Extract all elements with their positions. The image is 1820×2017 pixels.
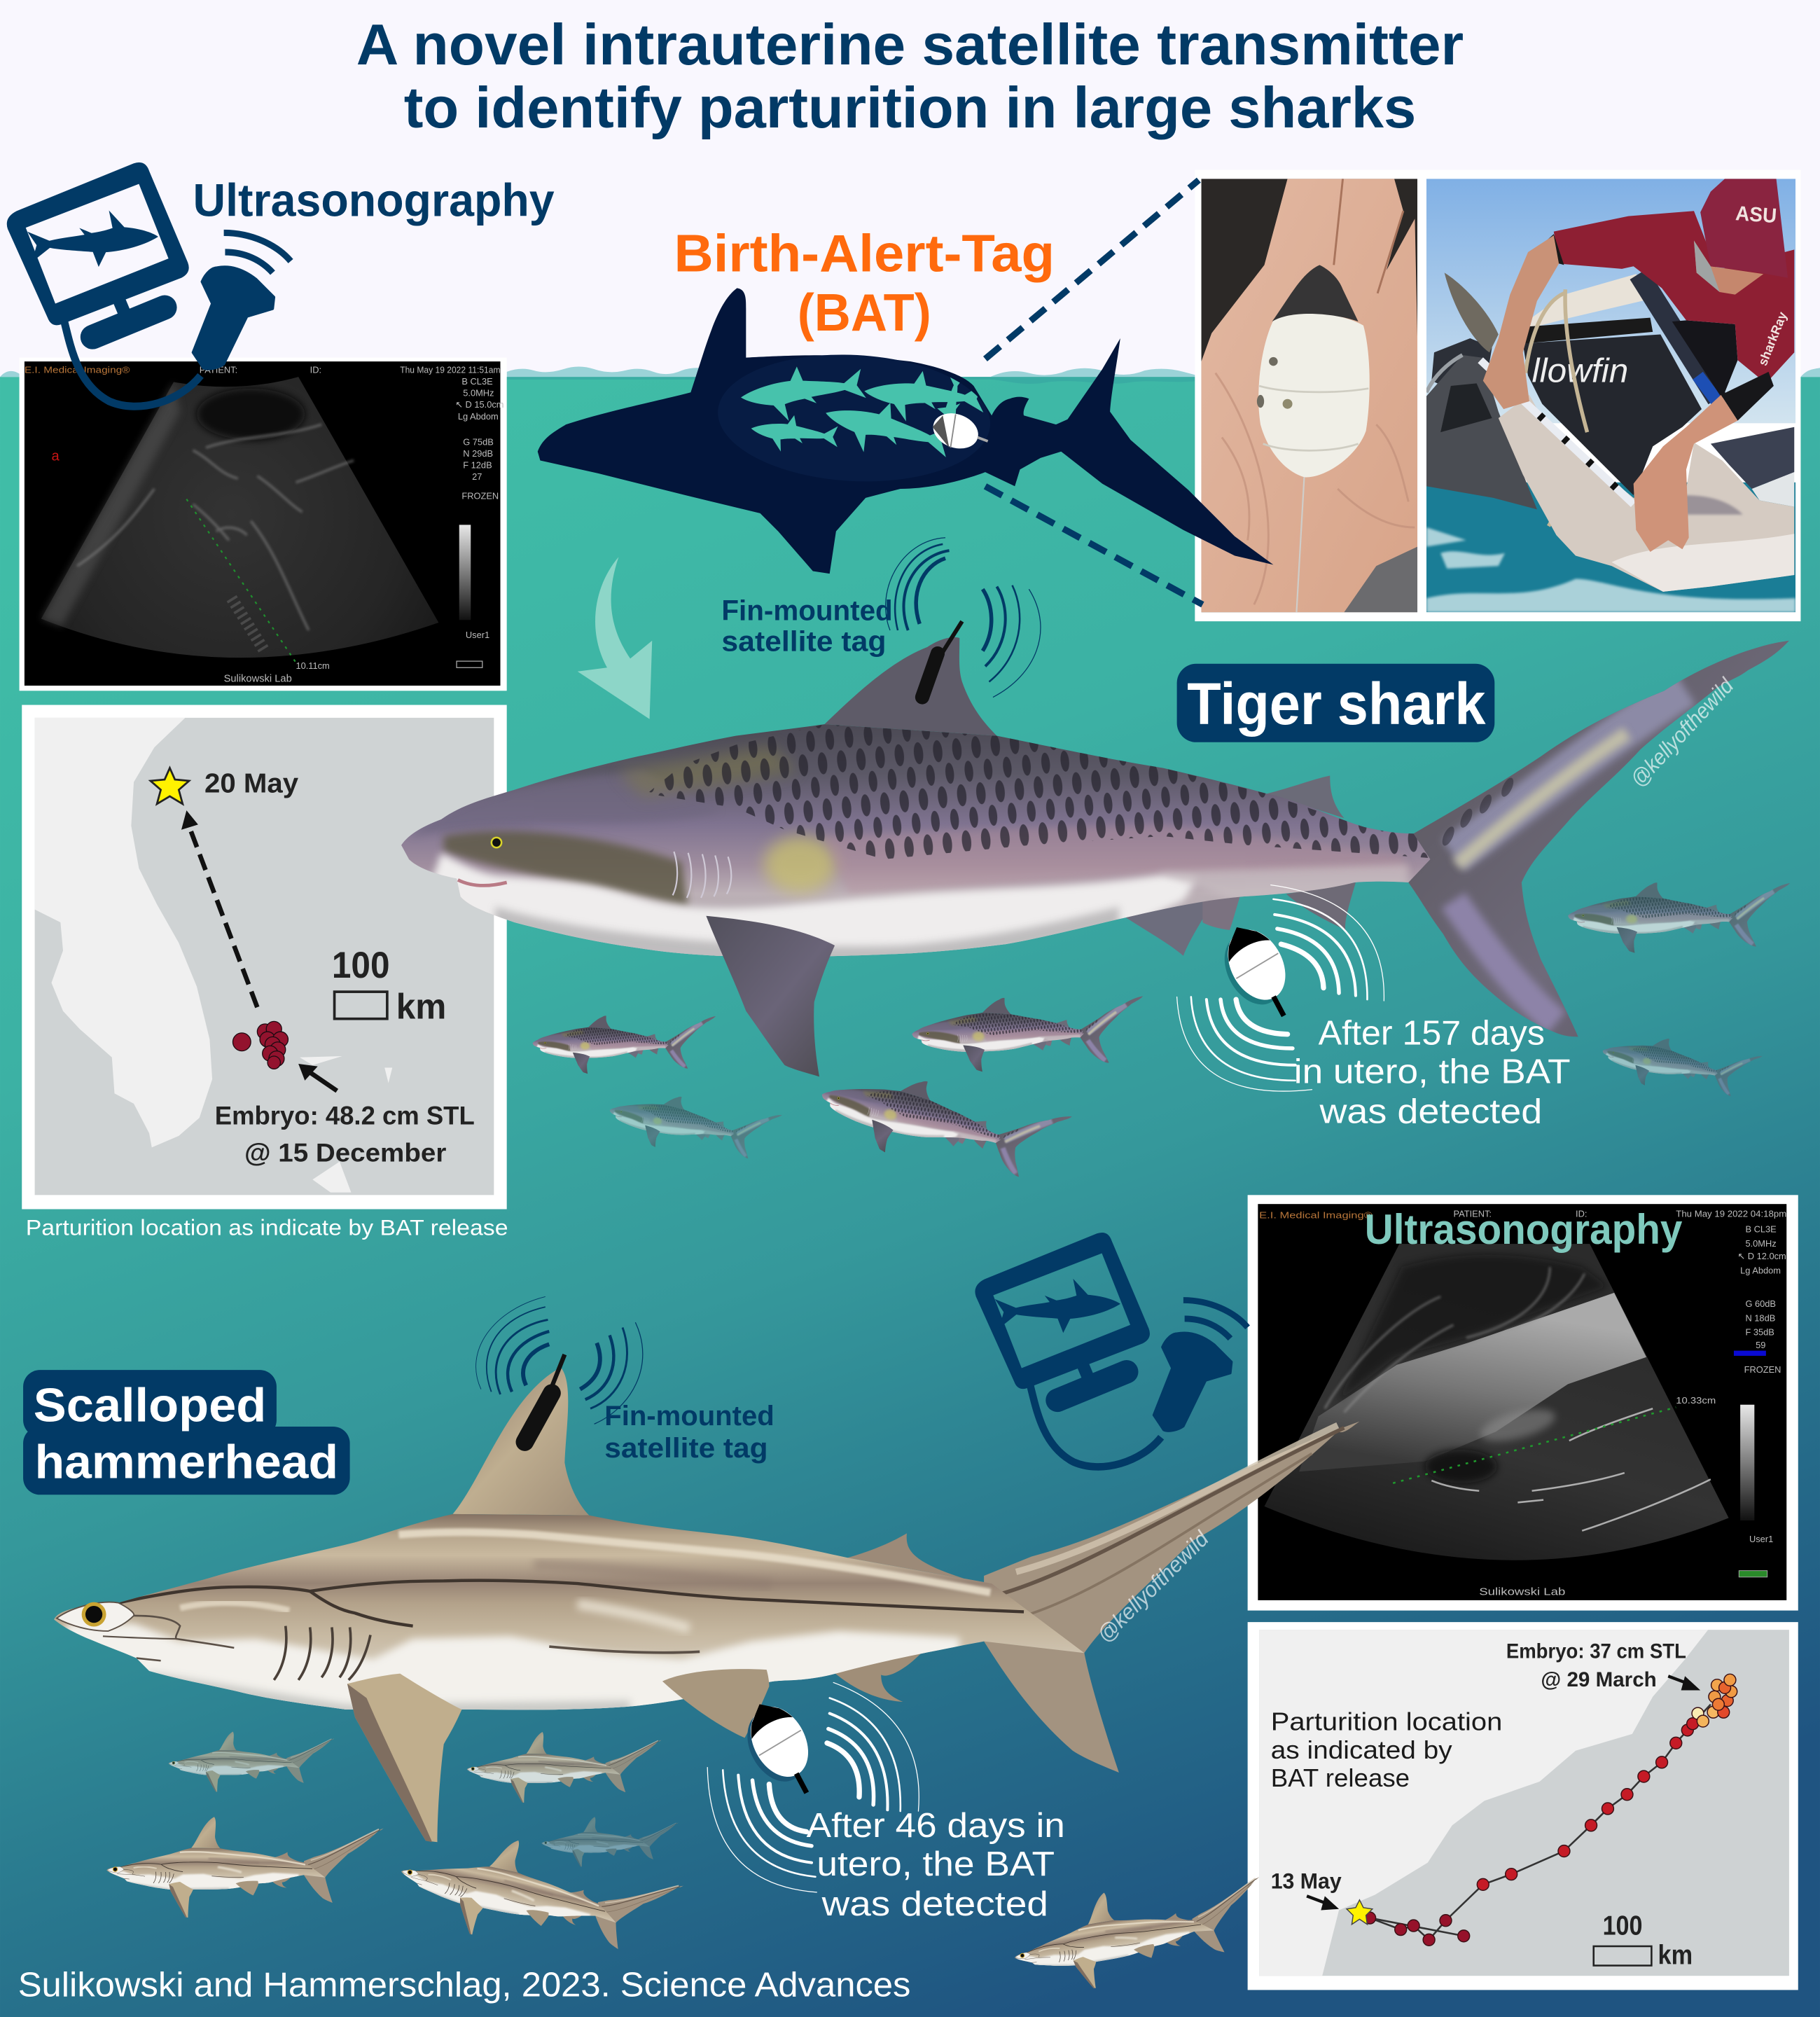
icon: curved arrow — [578, 557, 652, 719]
illustrator credit: @kellyofthewild — [1092, 1525, 1214, 1647]
white belly — [400, 853, 1197, 978]
shirt and arms — [1672, 320, 1737, 398]
fin-mounted tag on hammerhead — [525, 1354, 564, 1442]
scale bar: 100 — [332, 945, 390, 986]
label: scalloped hammerhead: Scalloped — [34, 1379, 266, 1432]
embryo label — [215, 1101, 475, 1167]
parturition note: BAT release — [1271, 1764, 1410, 1792]
body colouring — [54, 1532, 1024, 1724]
gill slits — [274, 1626, 370, 1680]
pectoral fin — [347, 1674, 461, 1842]
mouth — [458, 880, 507, 885]
panel: bottom ultrasound scan: FROZEN — [1744, 1364, 1781, 1375]
signal waves — [1177, 885, 1384, 1091]
carolina coastline — [1259, 1630, 1708, 1976]
hammerhead shark illustration — [54, 1367, 1359, 1842]
date label: 13 May — [1271, 1869, 1342, 1893]
boat hull, lower left — [1426, 355, 1537, 509]
body — [54, 1514, 1084, 1710]
womb area — [714, 348, 994, 488]
label: fin-mounted satellite tag: Fin-mounted — [604, 1401, 774, 1432]
scale bar — [332, 945, 446, 1027]
dashed zoom lines — [985, 180, 1202, 604]
tag — [732, 1692, 829, 1808]
panel: bottom ultrasound scan: N 18dB — [1745, 1312, 1775, 1323]
panel: top ultrasound scan: F 12dB — [463, 460, 492, 471]
callout: hammerhead detection: utero, the BAT — [817, 1844, 1055, 1883]
tail — [984, 1422, 1359, 1773]
icon: shark silhouette with pups and tag — [538, 288, 1273, 574]
panel: bottom ultrasound scan: 5.0MHz — [1745, 1238, 1777, 1249]
callout: tiger shark detection — [1294, 1013, 1571, 1130]
small tiger sharks — [532, 882, 1790, 1193]
label: fin-mounted satellite tag: satellite tag — [721, 625, 887, 657]
panel: top ultrasound scan: ID: — [310, 365, 321, 375]
anal fin — [1286, 882, 1356, 930]
callout: hammerhead detection: After 46 days in — [807, 1805, 1065, 1845]
pointer arrow — [1668, 1676, 1700, 1690]
second dorsal fin — [847, 1533, 992, 1583]
signal waves — [476, 1296, 643, 1424]
panel: top ultrasound scan: PATIENT: — [200, 365, 237, 375]
panel: top ultrasound scan: Lg Abdom — [458, 411, 499, 422]
embryo label: Embryo: 48.2 cm STL — [215, 1101, 475, 1130]
fin — [1445, 272, 1499, 352]
parturition note: Parturition location — [1271, 1707, 1502, 1735]
rope — [1525, 289, 1588, 526]
label: fin-mounted satellite tag: satellite tag — [604, 1433, 768, 1464]
overlaid heading: Ultrasonography — [1365, 1205, 1683, 1253]
panel: bottom ultrasound scan: Sulikowski Lab — [1479, 1587, 1565, 1598]
tail — [1408, 641, 1789, 1037]
measuring pole — [1480, 360, 1634, 504]
eye — [82, 1602, 106, 1627]
parturition note: as indicated by — [1271, 1736, 1452, 1764]
date label: 20 May — [204, 768, 299, 798]
body — [401, 724, 1430, 957]
panel: top ultrasound scan: N 29dB — [463, 448, 493, 459]
panel: top ultrasound scan — [20, 358, 507, 691]
embryo label: Embryo: 37 cm STL — [1506, 1640, 1686, 1663]
track line — [1370, 1705, 1711, 1940]
illustrator credit: @kellyofthewild — [1625, 673, 1739, 792]
lateral lines — [118, 1581, 1024, 1611]
pelvic fin — [1099, 894, 1213, 956]
scale bar: 100 — [1603, 1911, 1643, 1941]
title: A novel intrauterine satellite transmitter — [356, 12, 1464, 77]
panel: bottom ultrasound scan: F 35dB — [1745, 1327, 1774, 1338]
second dorsal fin — [1267, 776, 1344, 818]
white belly — [54, 1623, 959, 1724]
tag inside shark — [928, 408, 988, 455]
embryo silhouettes — [738, 360, 986, 472]
photo: tagging a shark — [1426, 179, 1795, 612]
released tag with signal: hammerhead — [707, 1682, 919, 1892]
head — [57, 1602, 134, 1631]
panel: top ultrasound scan: G 75dB — [463, 437, 494, 448]
panel: top ultrasound scan: 5.0MHz — [463, 388, 494, 398]
panel: bottom ultrasound scan: Lg Abdom — [1740, 1265, 1781, 1275]
anal fin — [831, 1648, 926, 1702]
dashed track arrow — [181, 810, 257, 1007]
panel: top ultrasound scan: a — [51, 449, 60, 464]
panel: tag photos — [1195, 169, 1800, 621]
star marker — [1347, 1900, 1373, 1925]
panel: bottom ultrasound scan: 10.33cm — [1676, 1395, 1716, 1406]
tag — [1209, 915, 1307, 1030]
track points — [1364, 1674, 1737, 1946]
label: scalloped hammerhead — [23, 1370, 350, 1495]
embryo label: @ 29 March — [1541, 1668, 1657, 1691]
panel: hammerhead track map — [1248, 1622, 1798, 1990]
highlights — [398, 1532, 990, 1593]
pointer arrow — [1307, 1896, 1339, 1911]
panel: top ultrasound scan: FROZEN — [461, 491, 499, 501]
panel: bottom ultrasound scan: Thu May 19 2022 04:18pm — [1676, 1209, 1786, 1219]
panel: bottom ultrasound scan: ID: — [1576, 1209, 1587, 1219]
measurement line — [186, 499, 296, 663]
boat hull — [1523, 335, 1702, 495]
title — [356, 12, 1464, 140]
pointer arrow — [298, 1064, 337, 1091]
scale bar: km — [1658, 1941, 1693, 1971]
released tag with signal: tiger shark — [1177, 885, 1384, 1091]
dorsal fin — [453, 1367, 589, 1516]
fin-mounted tag on tiger shark — [922, 621, 962, 698]
photo: tag in hand — [1202, 179, 1417, 612]
pelvic fin — [662, 1669, 769, 1738]
label: fin-mounted satellite tag — [721, 594, 893, 657]
callout: hammerhead detection: was detected — [821, 1884, 1048, 1923]
track points — [232, 1021, 288, 1069]
eye — [491, 837, 502, 849]
label: fin-mounted satellite tag — [604, 1401, 774, 1464]
signal waves — [886, 538, 1041, 698]
scale bar — [1594, 1911, 1693, 1971]
panel: tiger shark track map — [22, 705, 507, 1209]
label: fin-mounted satellite tag: Fin-mounted — [721, 594, 893, 626]
water — [1426, 483, 1795, 612]
label: tiger shark: Tiger shark — [1187, 671, 1486, 737]
map caption: Parturition location as indicate by BAT release — [26, 1215, 508, 1240]
icon: ultrasound machine — [975, 1233, 1248, 1467]
panel: top ultrasound scan: 27 — [472, 471, 482, 482]
citation: Sulikowski and Hammerschlag, 2023. Science Advances — [18, 1965, 910, 2004]
icon: ultrasound machine — [7, 162, 291, 406]
boat name: llowfin — [1532, 353, 1628, 390]
panel: bottom ultrasound scan: User1 — [1749, 1534, 1773, 1544]
callout: tiger shark detection: After 157 days — [1319, 1013, 1545, 1052]
title: to identify parturition in large sharks — [404, 75, 1416, 140]
dorsal fin — [824, 637, 996, 736]
shark body — [1499, 395, 1794, 592]
sleeve print: sharkRay — [1755, 309, 1790, 368]
ultrasound sector image — [41, 377, 438, 658]
outboard motor — [1431, 338, 1492, 386]
panel: bottom ultrasound scan: PATIENT: — [1454, 1209, 1492, 1219]
heading: birth alert tag: Birth-Alert-Tag — [674, 224, 1055, 283]
callout: hammerhead detection — [807, 1805, 1065, 1923]
gill slits — [673, 852, 731, 898]
body colouring — [400, 724, 1447, 978]
panel: top ultrasound scan: Sulikowski Lab — [224, 673, 292, 684]
panel: bottom ultrasound scan: ↖ D 12.0cm — [1737, 1251, 1786, 1261]
callout: tiger shark detection: in utero, the BAT — [1294, 1052, 1571, 1091]
panel: top ultrasound scan: ↖ D 15.0cm — [455, 399, 504, 410]
satellite tag body — [1258, 313, 1370, 478]
heading: ultrasonography: Ultrasonography — [193, 175, 555, 227]
panel: top ultrasound scan: 10.11cm — [296, 660, 330, 671]
panel: top ultrasound scan: E.I. Medical Imaging® — [25, 365, 130, 375]
star marker — [151, 768, 189, 804]
face and scarf — [1694, 240, 1763, 295]
ultrasound sector image — [1265, 1244, 1729, 1560]
callout: tiger shark detection: was detected — [1319, 1091, 1542, 1130]
panel: bottom ultrasound scan: E.I. Medical Imaging® — [1259, 1209, 1373, 1220]
panel: top ultrasound scan: B CL3E — [461, 376, 493, 387]
small hammerhead sharks — [106, 1731, 1273, 2001]
pectoral fin — [706, 916, 835, 1076]
label: scalloped hammerhead: hammerhead — [35, 1435, 338, 1488]
panel: bottom ultrasound scan: 59 — [1756, 1340, 1765, 1350]
heading: birth alert tag: (BAT) — [798, 283, 931, 342]
florida coastline — [35, 718, 212, 1147]
embryo label: @ 15 December — [244, 1139, 446, 1167]
panel: bottom ultrasound scan — [1248, 1195, 1798, 1611]
panel: bottom ultrasound scan: B CL3E — [1745, 1224, 1777, 1235]
measurement line — [1393, 1407, 1676, 1483]
panel: top ultrasound scan: Thu May 19 2022 11:51am — [400, 365, 501, 375]
panel: bottom ultrasound scan: G 60dB — [1745, 1298, 1776, 1309]
embryo label — [1506, 1640, 1686, 1691]
parturition note — [1271, 1707, 1502, 1792]
photo: tagging a shark: ASU — [1735, 202, 1777, 228]
scale bar: km — [396, 986, 446, 1027]
water surface waves — [0, 366, 1820, 384]
cap — [1700, 179, 1788, 278]
signal waves — [707, 1682, 919, 1892]
bahamas islands — [300, 1056, 392, 1193]
heading: birth alert tag — [674, 224, 1055, 342]
tiger stripes — [647, 724, 1447, 859]
panel: top ultrasound scan: User1 — [466, 630, 489, 640]
tiger shark illustration — [400, 637, 1789, 1076]
